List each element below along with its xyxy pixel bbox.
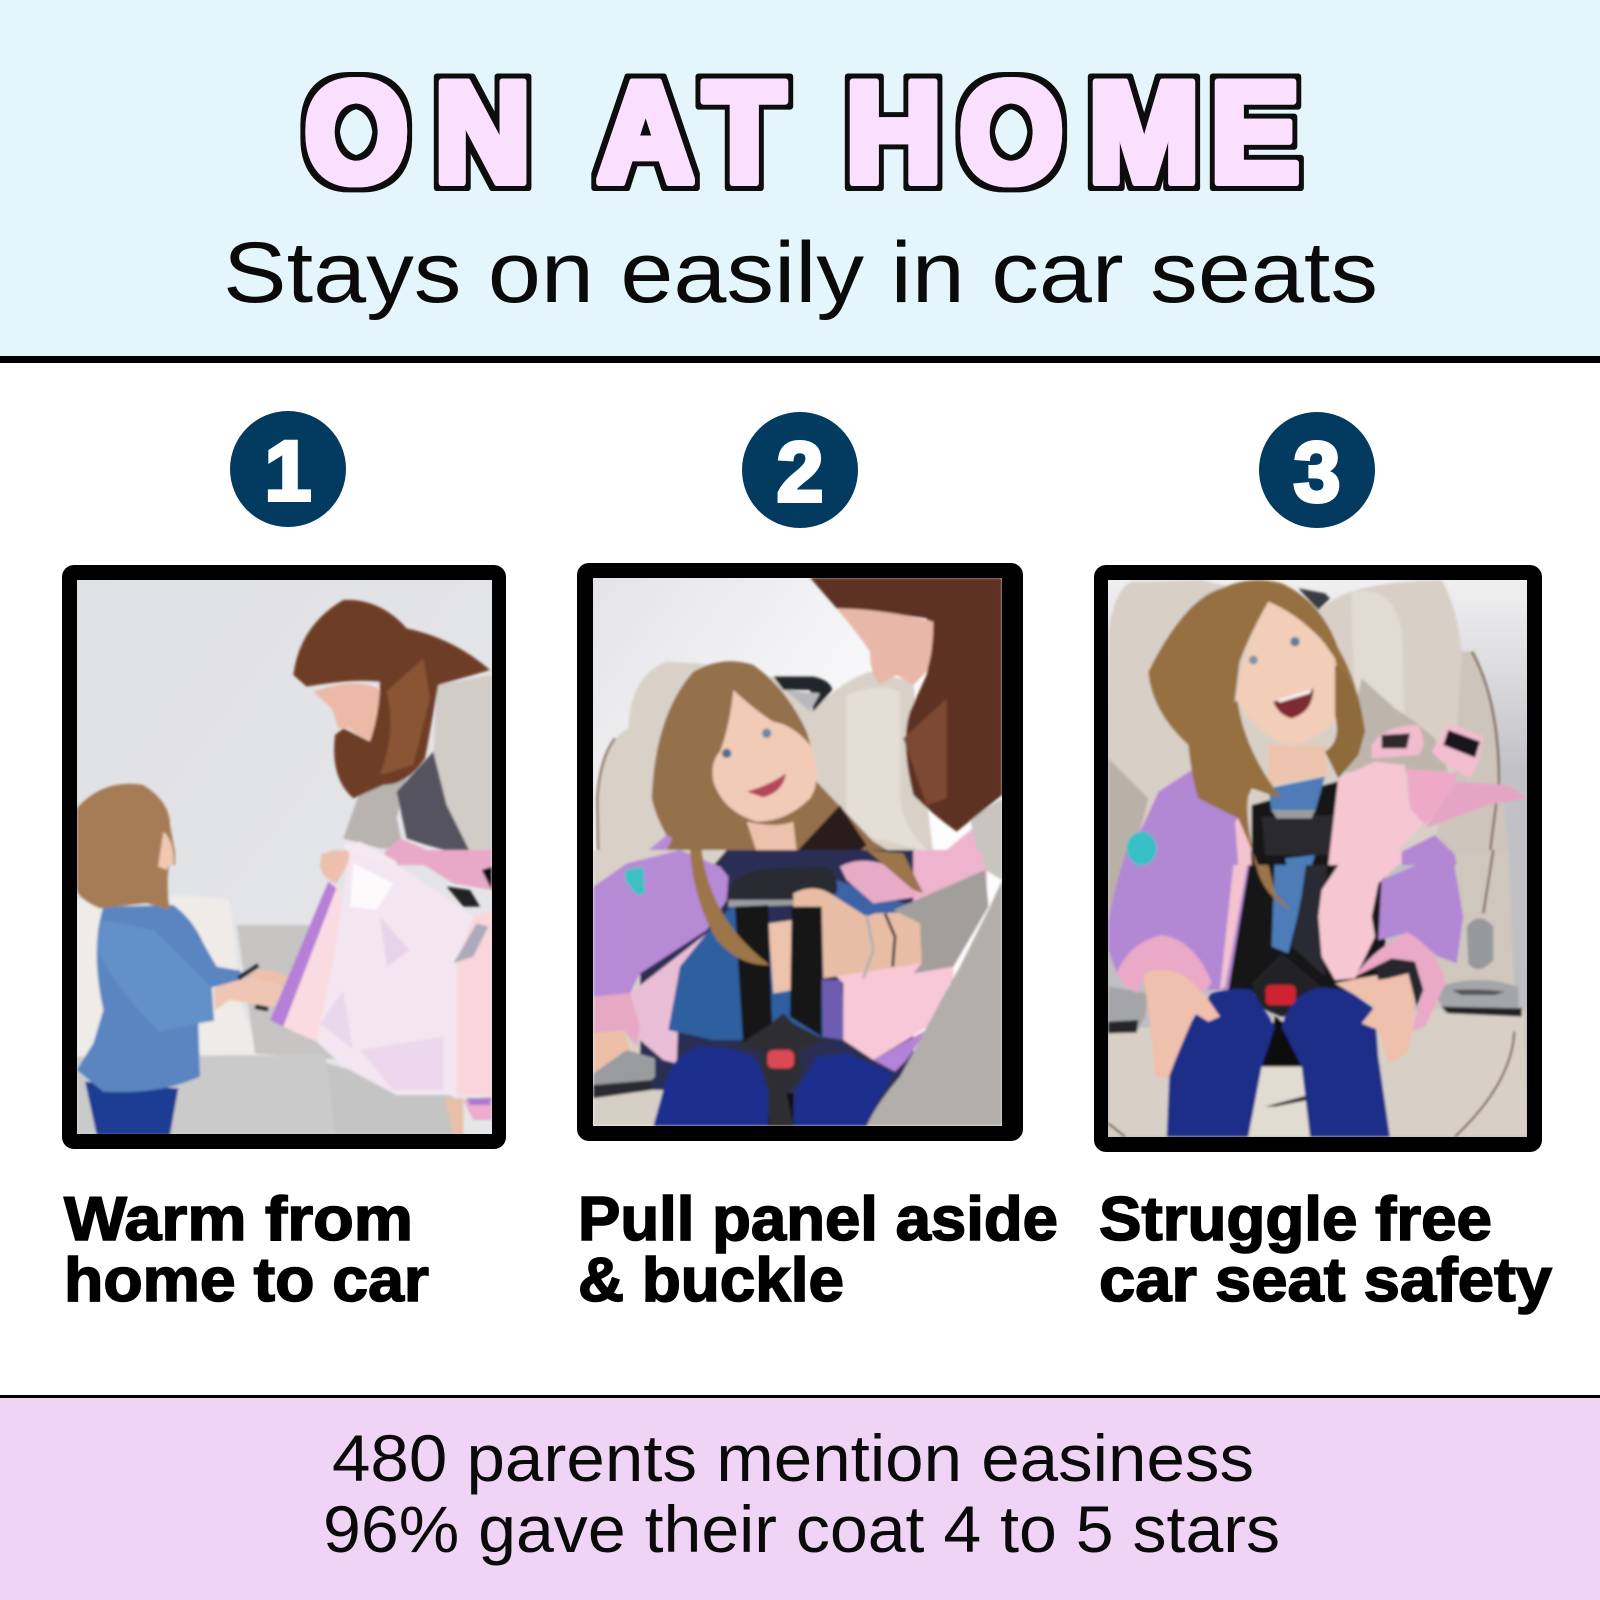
step badge 3	[1259, 412, 1375, 528]
caption 1: Warm from	[64, 1185, 413, 1254]
caption 1: home to car	[64, 1246, 429, 1315]
footer stats: 480 parents mention easiness	[332, 1421, 1254, 1495]
footer band	[0, 1397, 1600, 1600]
caption 3	[1099, 1185, 1553, 1315]
photo panel 1: mother and child with coat	[62, 565, 506, 1149]
step badge 2	[742, 412, 858, 528]
step badge 1	[230, 411, 346, 527]
photo panel 2: buckling the harness	[577, 563, 1023, 1141]
step badge 2: 2	[777, 425, 823, 519]
step badge 1: 1	[265, 424, 311, 518]
step badge 3: 3	[1294, 425, 1340, 519]
subtitle: Stays on easily in car seats	[223, 225, 1378, 321]
footer stats	[323, 1421, 1280, 1566]
header band	[0, 0, 1600, 357]
title: ON AT HOME	[0, 53, 1299, 211]
caption 1	[64, 1185, 429, 1315]
caption 2: Pull panel aside	[578, 1185, 1058, 1254]
photo panel 3: laughing child buckled in seat	[1094, 565, 1542, 1152]
caption 2	[578, 1185, 1058, 1315]
caption 3: Struggle free	[1099, 1185, 1492, 1254]
footer stats: 96% gave their coat 4 to 5 stars	[323, 1492, 1280, 1566]
caption 2: & buckle	[578, 1246, 844, 1315]
caption 3: car seat safety	[1099, 1246, 1553, 1315]
